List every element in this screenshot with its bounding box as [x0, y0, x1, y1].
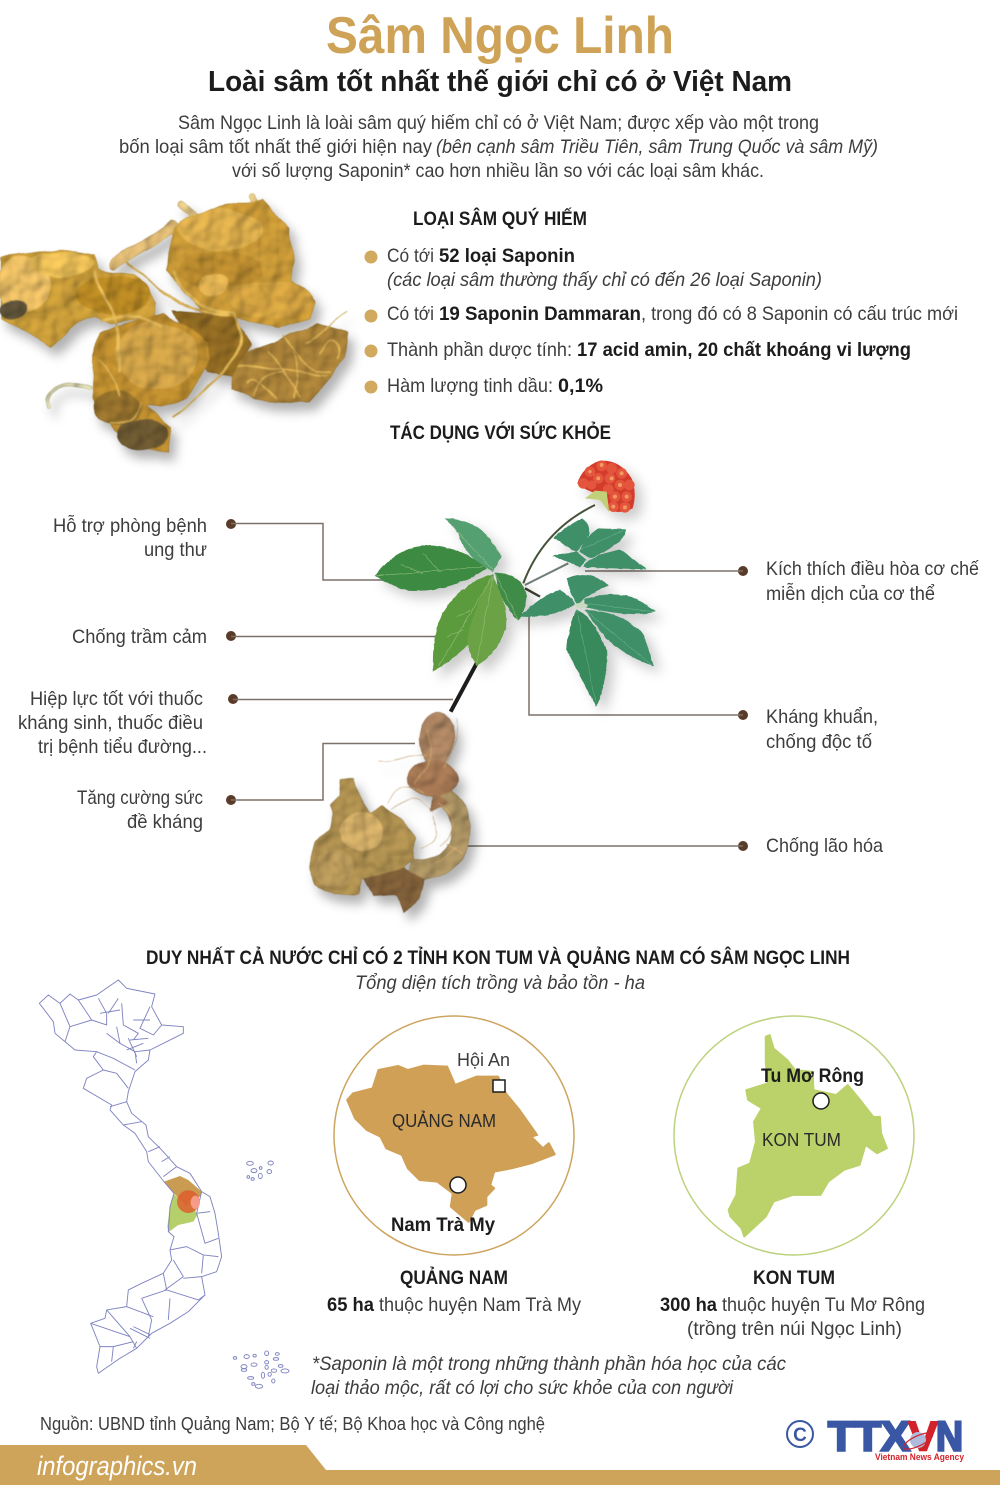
callout: anti-depression — [72, 626, 443, 648]
callout: synergy with drugs: Hiệp lực tốt với thuốc — [30, 688, 203, 710]
bullet: 52 saponin — [364, 245, 822, 291]
heading: health effects: TÁC DỤNG VỚI SỨC KHỎE — [390, 420, 611, 444]
title: Sâm Ngọc Linh — [326, 7, 674, 65]
intro text block: Sâm Ngọc Linh là loài sâm quý hiếm chỉ có ở Việt Nam; được xếp vào một trong — [178, 112, 819, 134]
icon: Nam Tra My marker — [450, 1177, 466, 1193]
left leaf cluster — [375, 518, 527, 672]
callout: cancer prevention: ung thư — [144, 539, 207, 561]
label: Hoi An: Hội An — [457, 1049, 510, 1070]
footnote — [311, 1353, 786, 1399]
map: Vietnam — [39, 980, 289, 1388]
photo: ginseng root — [0, 195, 347, 455]
bullet: 52 saponin: Có tới — [387, 245, 434, 267]
footnote: *Saponin là một trong những thành phần hóa học của các — [312, 1353, 786, 1375]
label: Quang Nam: QUẢNG NAM — [392, 1110, 496, 1131]
berries — [577, 461, 635, 513]
icon: copyright — [787, 1421, 813, 1447]
logo: TTXVN: TTX — [828, 1412, 910, 1460]
text block: Quang Nam area: 65 ha — [327, 1294, 374, 1316]
text block: Kon Tum area: (trồng trên núi Ngọc Linh) — [687, 1318, 902, 1340]
illustration: ginseng plant — [308, 461, 656, 913]
logo: TTXVN: V — [908, 1412, 938, 1460]
callout: synergy with drugs: trị bệnh tiểu đường... — [38, 736, 207, 758]
text block: Kon Tum area: thuộc huyện Tu Mơ Rông — [722, 1294, 925, 1316]
bullet: 52 saponin: (các loại sâm thường thấy chỉ có đến 26 loại Saponin) — [387, 269, 822, 291]
callout: cancer prevention: Hỗ trợ phòng bệnh — [53, 514, 207, 537]
callout: antibacterial: chống độc tố — [766, 731, 872, 753]
section heading: provinces: DUY NHẤT CẢ NƯỚC CHỈ CÓ 2 TỈNH KON TUM VÀ QUẢNG NAM CÓ SÂM NGỌC LINH — [146, 945, 850, 969]
bullet: 52 saponin: 52 loại Saponin — [439, 245, 575, 267]
callout: cancer prevention — [53, 514, 395, 580]
right leaf cluster — [520, 518, 656, 707]
footer band — [0, 1445, 1000, 1485]
text block: Quang Nam area — [327, 1266, 581, 1316]
text block: Kon Tum area: KON TUM — [753, 1267, 835, 1289]
callout: immune regulation — [585, 558, 979, 605]
text block: Kon Tum area: 300 ha — [660, 1294, 717, 1316]
callout: synergy with drugs: kháng sinh, thuốc điều — [18, 712, 203, 734]
source line: Nguồn: UBND tỉnh Quảng Nam; Bộ Y tế; Bộ Khoa học và Công nghệ — [40, 1413, 545, 1434]
icon: copyright: C — [793, 1425, 807, 1446]
text block: Kon Tum area — [660, 1267, 925, 1340]
section subheading: Tổng diện tích trồng và bảo tồn - ha — [355, 972, 645, 994]
bullet: essential oil: 0,1% — [558, 375, 603, 397]
logo: TTXVN: N — [936, 1412, 963, 1460]
bullet: medicinal composition: 17 acid amin, 20 chất khoáng vi lượng — [577, 339, 911, 361]
callout: resistance: đề kháng — [127, 811, 203, 833]
intro text block: (bên cạnh sâm Triều Tiên, sâm Trung Quốc và sâm Mỹ) — [436, 136, 878, 158]
stems — [451, 505, 595, 712]
bullet: 19 saponin dammaran: 19 Saponin Dammaran — [439, 303, 641, 325]
text block: Quang Nam area: thuộc huyện Nam Trà My — [379, 1294, 581, 1316]
callout: immune regulation: Kích thích điều hòa cơ chế — [766, 558, 979, 580]
label: Nam Tra My: Nam Trà My — [391, 1214, 495, 1236]
callout: anti-aging: Chống lão hóa — [766, 835, 883, 857]
map: Quang Nam — [334, 1016, 574, 1255]
footnote: loại thảo mộc, rất có lợi cho sức khỏe của con người — [311, 1377, 734, 1399]
text block: Quang Nam area: QUẢNG NAM — [400, 1266, 508, 1289]
footer brand: infographics.vn — [37, 1451, 197, 1481]
label: Kon Tum: KON TUM — [762, 1129, 841, 1150]
callout: anti-depression: Chống trầm cảm — [72, 626, 207, 648]
root — [308, 712, 463, 913]
callout: immune regulation: miễn dịch của cơ thể — [766, 582, 935, 605]
subtitle: Loài sâm tốt nhất thế giới chỉ có ở Việt Nam — [208, 66, 792, 98]
map: Kon Tum — [674, 1016, 914, 1255]
icon: Hoi An square — [493, 1080, 505, 1092]
callout: antibacterial: Kháng khuẩn, — [766, 706, 878, 728]
callout: anti-aging — [465, 835, 883, 857]
bullet: 19 saponin dammaran: , trong đó có 8 Saponin có cấu trúc mới — [641, 303, 958, 325]
bullet: 19 saponin dammaran: Có tới — [387, 303, 434, 325]
label: Tu Mo Rong: Tu Mơ Rông — [761, 1065, 864, 1087]
intro text block — [119, 112, 878, 182]
bullet: 19 saponin dammaran — [364, 303, 958, 325]
callout: antibacterial — [529, 615, 878, 753]
bullet: medicinal composition: Thành phần dược tính: — [387, 339, 572, 361]
logo: TTXVN: Vietnam News Agency — [875, 1452, 965, 1463]
icon: Tu Mo Rong marker — [813, 1093, 829, 1109]
callout: resistance: Tăng cường sức — [77, 787, 203, 809]
logo: TTXVN — [787, 1412, 965, 1463]
intro text block: với số lượng Saponin* cao hơn nhiều lần so với các loại sâm khác. — [232, 160, 764, 182]
bullet list: saponin facts — [364, 245, 958, 397]
bullet: essential oil: Hàm lượng tinh dầu: — [387, 375, 553, 397]
bullet: medicinal composition — [364, 339, 911, 361]
callout: synergy with drugs — [18, 688, 453, 758]
heading: rare ginseng: LOẠI SÂM QUÝ HIẾM — [413, 206, 587, 230]
callout: resistance — [77, 744, 415, 833]
intro text block: bốn loại sâm tốt nhất thế giới hiện nay — [119, 136, 432, 158]
